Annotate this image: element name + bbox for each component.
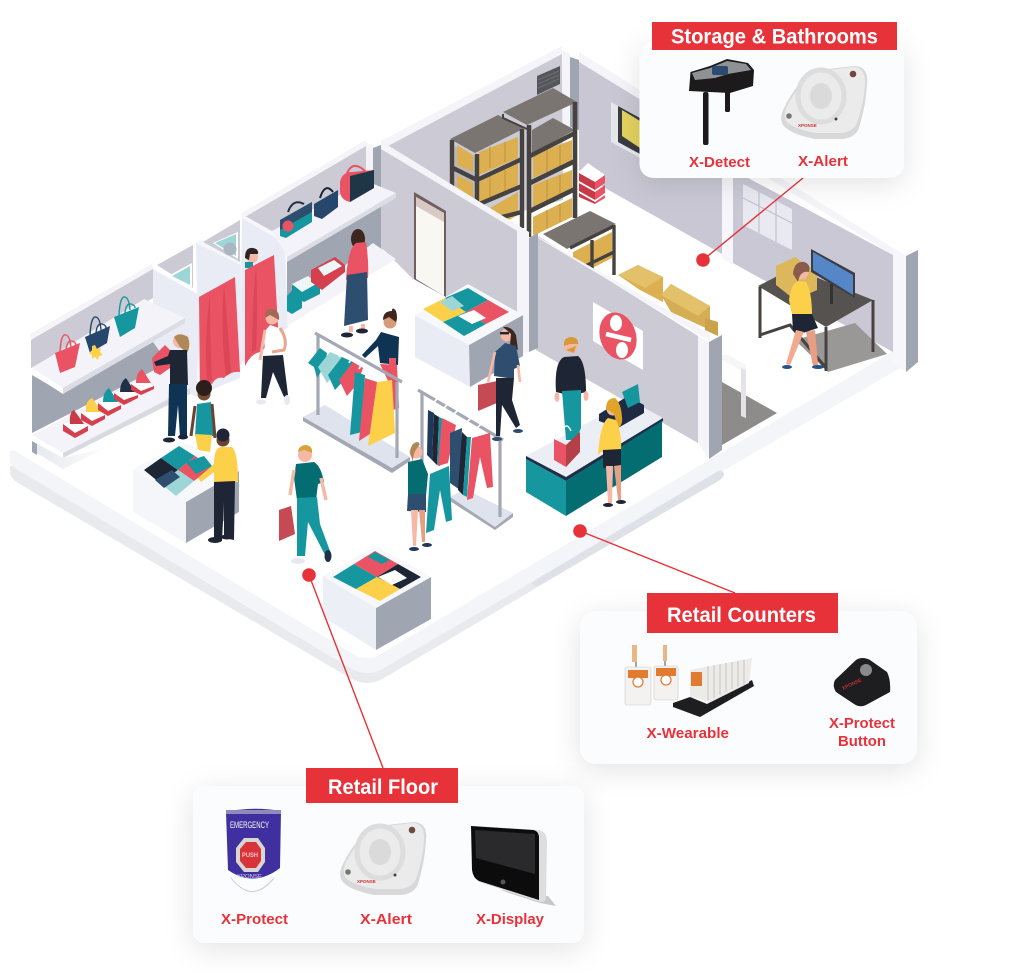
label: x-protect button: X-Protect [829, 716, 895, 732]
label: x-alert: X-Alert [360, 912, 412, 928]
icon: x-alert: XPONSE [357, 879, 376, 884]
pillar: office corner [893, 248, 918, 372]
shopper: woman with glasses and bag [478, 327, 523, 441]
callout line: floor [302, 568, 383, 768]
office desk with worker [758, 249, 887, 372]
icon: x-protect: PUSH [242, 852, 258, 859]
trousers held [426, 466, 452, 533]
icon: x-protect: EMERGENCY [230, 820, 269, 830]
yellow window [611, 102, 640, 158]
label: x-wearable: X-Wearable [646, 726, 729, 742]
shopper: woman holding trousers [407, 442, 452, 551]
label: x-protect button: Button [838, 734, 886, 750]
worker [782, 262, 824, 369]
promo sign [593, 302, 643, 370]
wall: retail and storage divider [366, 141, 529, 355]
icon: x-protect button [834, 658, 890, 706]
carton on desk [776, 257, 817, 300]
pillar: storage corner [563, 50, 579, 130]
bathroom doorway [722, 354, 777, 445]
icon: x-alert: XPONSE [798, 123, 817, 128]
icon: x-display [471, 826, 556, 906]
shelf unit 2 [503, 88, 577, 237]
wall: front divider with promo sign [517, 230, 722, 459]
shoe displays [63, 369, 154, 438]
heading: retail counters: Retail Counters [667, 604, 816, 627]
storage room walls [381, 46, 918, 372]
label: x-protect: X-Protect [221, 912, 288, 928]
storage shelf unit 3 and cartons [543, 211, 718, 336]
pillar: divider rear [366, 143, 381, 250]
storage shelving units [450, 88, 605, 237]
icon: x-wearable [625, 645, 754, 717]
shopper: woman in teal top [191, 380, 215, 452]
handbag: navy boxy [314, 188, 338, 219]
back wall shelves: bags and shoe boxes [240, 140, 396, 326]
shopper: woman with long skirt [341, 229, 368, 338]
icon: x-protect button: XPONSE [841, 677, 863, 692]
label: x-protect button [829, 716, 895, 750]
office wall [722, 150, 733, 265]
heading: retail counters [647, 593, 838, 633]
shopping bag on counter [554, 426, 580, 467]
heading: storage and bathrooms: Storage & Bathrooms [671, 26, 878, 48]
pillar: divider middle [517, 230, 538, 355]
shopper: woman holding red bag [152, 334, 189, 442]
table: front folded shirts [323, 546, 431, 650]
duffel bag: red and navy [340, 166, 374, 202]
label: x-detect: X-Detect [689, 155, 750, 171]
fitting room door [414, 192, 446, 297]
office window [743, 184, 792, 250]
icon: x-protect: XPONSE [237, 874, 262, 880]
wall vent [537, 66, 560, 95]
woman at counter [598, 398, 626, 507]
shopper behind rack [362, 308, 399, 410]
checkout counter [526, 337, 663, 516]
icon: x-alert [340, 822, 426, 895]
person in fitting room [245, 248, 258, 268]
cash register [599, 384, 644, 428]
rack: tops and dresses [303, 308, 410, 473]
handbag: navy [85, 317, 110, 360]
panel: retail counters [580, 593, 917, 764]
table: upper folded shirts [415, 284, 523, 387]
shopper: woman in white top [256, 309, 290, 405]
callout line: storage [696, 178, 803, 267]
callout line: counters [573, 524, 735, 593]
shoe boxes [287, 257, 345, 314]
duffel bag: navy and teal [280, 202, 312, 238]
left wall shelves: bags and heels [30, 264, 190, 469]
table: left folded shirts [133, 443, 239, 543]
rack: trousers [418, 390, 513, 530]
heading: retail floor: Retail Floor [328, 776, 438, 799]
monitor [811, 249, 855, 304]
shopper: man in teal with bag [279, 445, 332, 564]
fitting rooms with curtains [153, 214, 288, 397]
curtain: right [245, 255, 279, 366]
heading: retail floor [306, 768, 458, 803]
icon: x-protect [226, 809, 281, 892]
pillar: divider front [698, 335, 722, 459]
label: x-alert: X-Alert [798, 154, 848, 170]
handbag: red [55, 335, 80, 373]
red box stack [579, 163, 605, 204]
man behind counter [554, 337, 588, 440]
floor platform [10, 120, 900, 683]
panel: retail floor [193, 768, 584, 943]
shelf unit 1 [450, 115, 525, 230]
shopper: man in yellow sweater [198, 428, 238, 543]
panel: storage and bathrooms [640, 22, 904, 178]
label: x-display: X-Display [476, 912, 544, 928]
handbag: teal [114, 297, 139, 337]
icon: x-detect [689, 59, 754, 145]
curtain: left [199, 277, 240, 388]
icon: x-alert [781, 66, 867, 139]
